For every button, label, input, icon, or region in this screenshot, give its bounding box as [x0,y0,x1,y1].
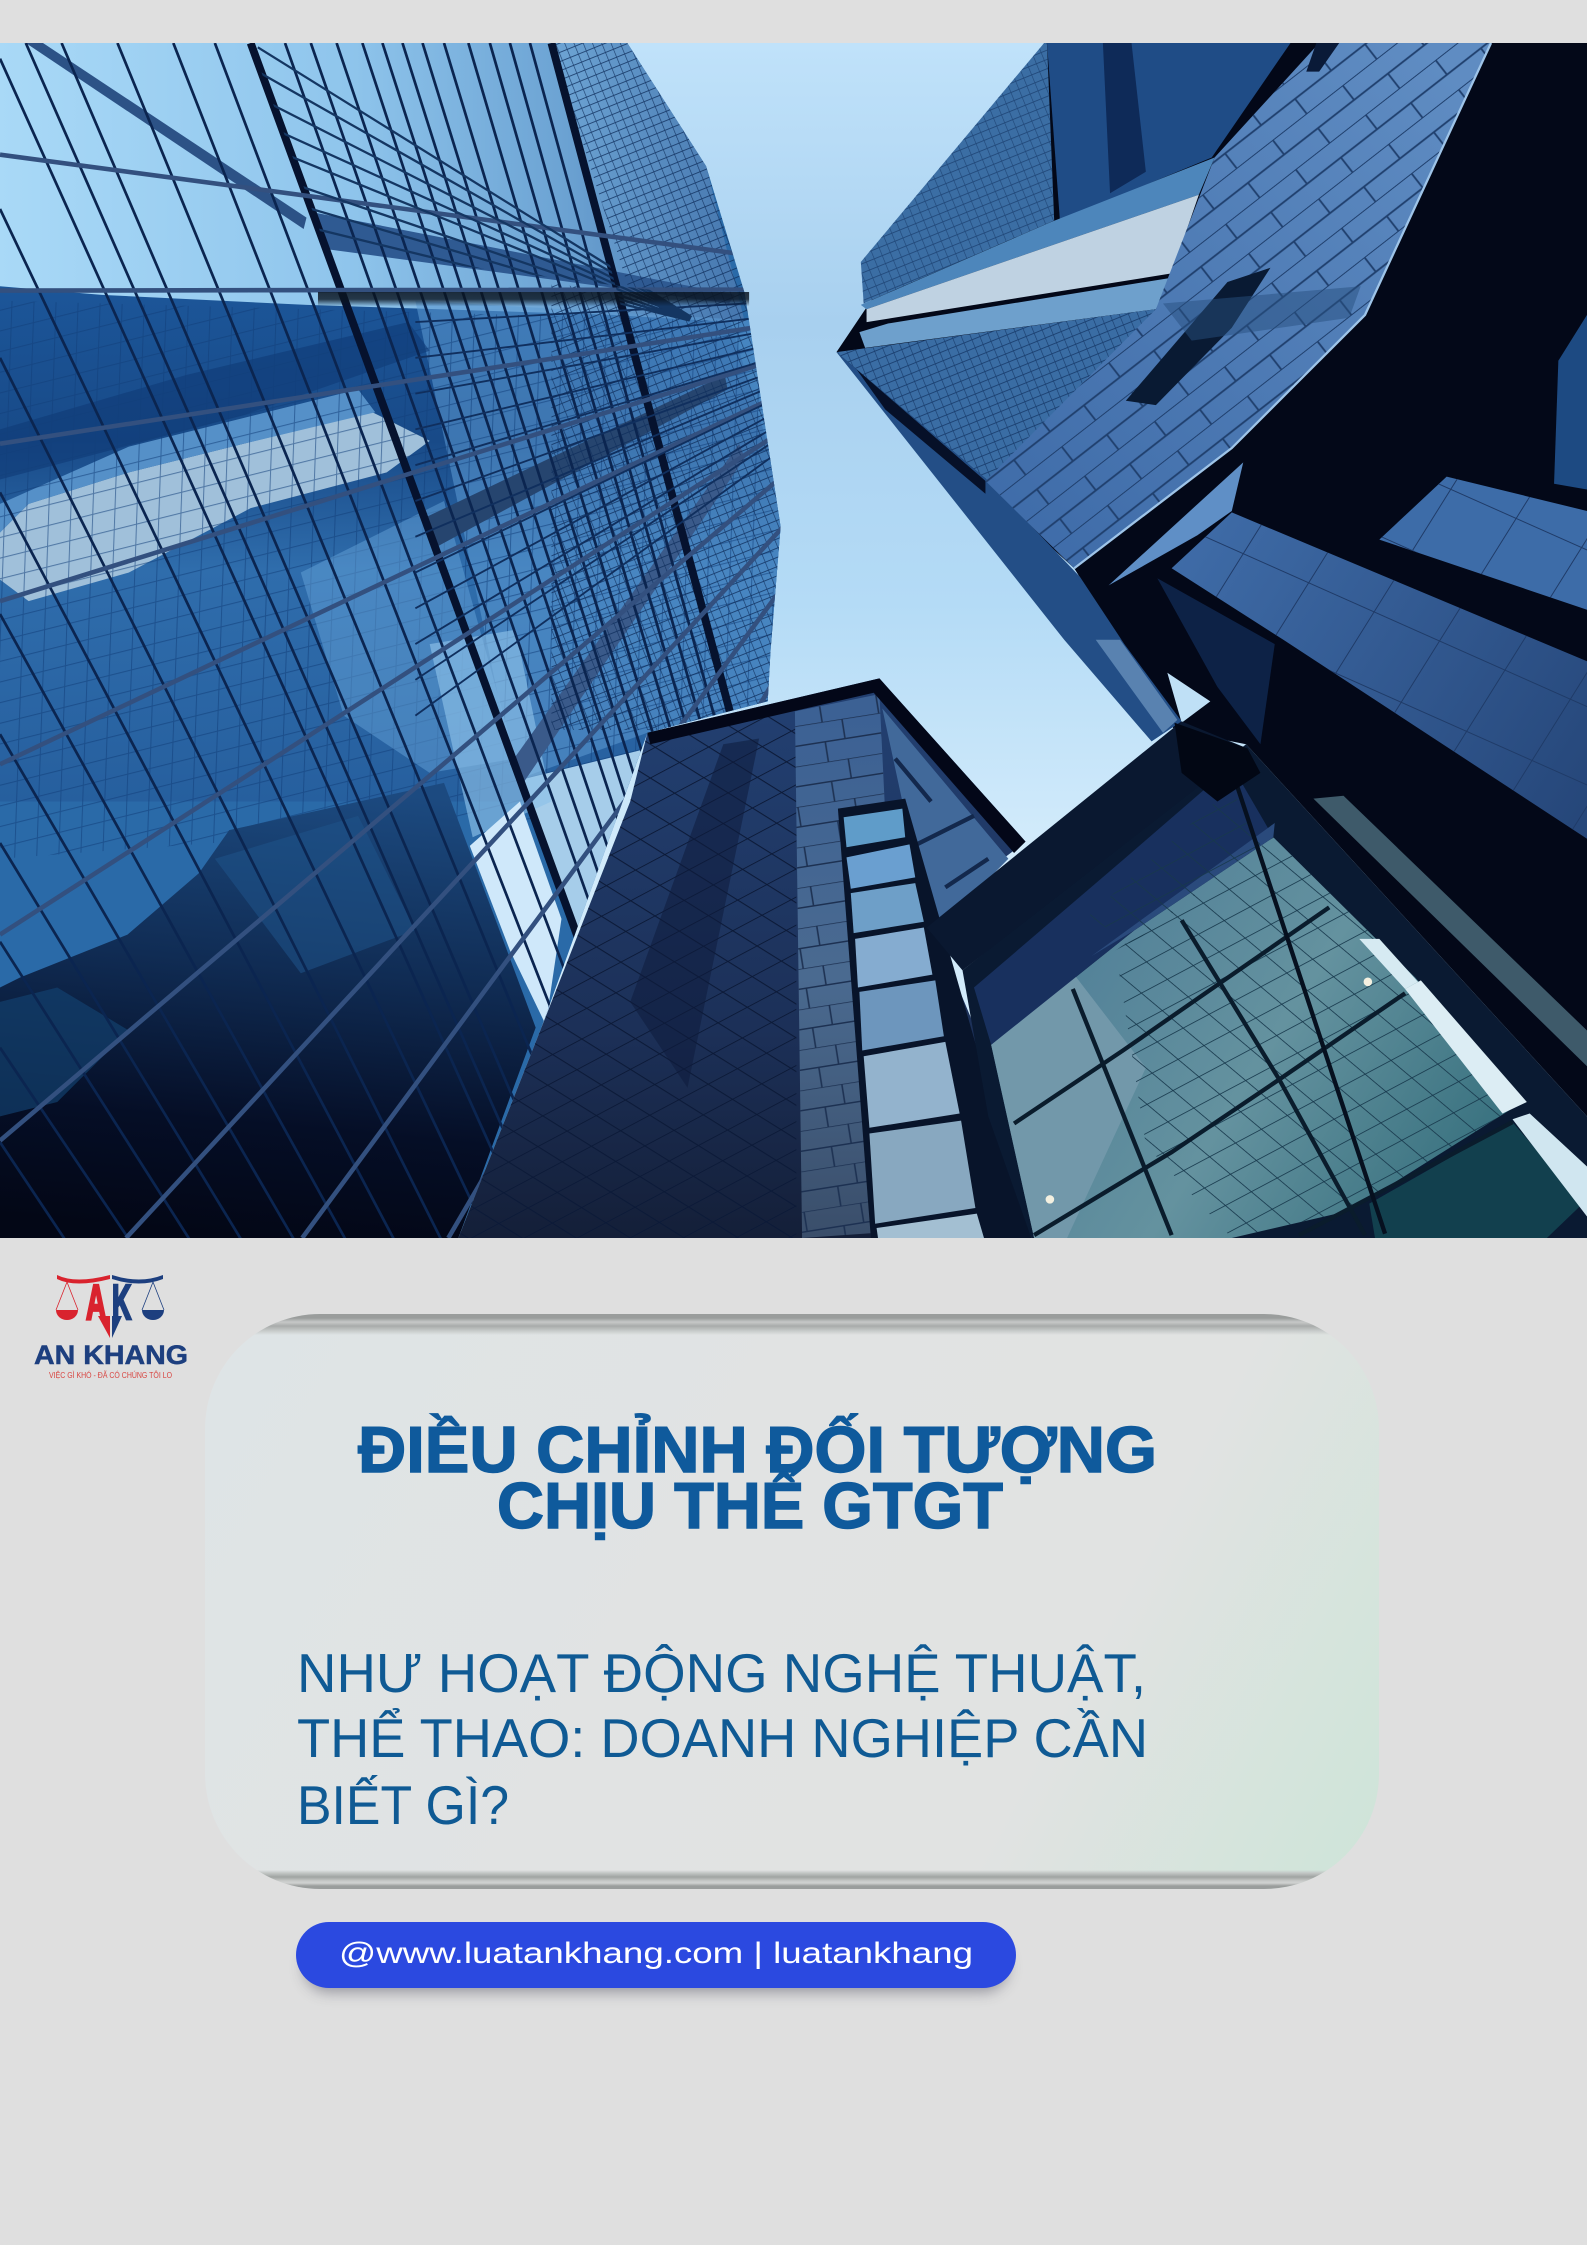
panel: title card [205,1314,1379,1889]
middle building with window column [458,678,1031,1238]
photo: skyscrapers seen from below [0,43,1587,1238]
contact button: @www.luatankhang.com | luatankhang [339,1937,973,1970]
logo: An Khang law firm [34,1275,188,1380]
sky [0,43,1587,1238]
right upper building [836,43,1587,1116]
subtitle [297,1642,1148,1836]
logo tagline: VIỆC GÌ KHÓ - ĐÃ CÓ CHÚNG TÔI LO [49,1370,172,1380]
title: ĐIỀU CHỈNH ĐỐI TƯỢNG [358,1413,1157,1486]
right lower glass block [927,721,1587,1238]
logo name: AN KHANG [34,1340,188,1370]
left glass tower [0,43,781,1238]
contact button [296,1922,1016,1988]
title: CHỊU THẾ GTGT [497,1469,1003,1542]
monogram A: A [86,1276,106,1330]
subtitle: BIẾT GÌ? [297,1774,509,1836]
title [358,1413,1157,1542]
subtitle: NHƯ HOẠT ĐỘNG NGHỆ THUẬT, [297,1642,1146,1704]
subtitle: THỂ THAO: DOANH NGHIỆP CẦN [297,1707,1148,1769]
icon: scales of justice right [112,1275,164,1320]
icon: scales of justice left [56,1275,110,1320]
monogram K: K [112,1275,132,1330]
shadow bar artifact across left tower [318,292,749,306]
